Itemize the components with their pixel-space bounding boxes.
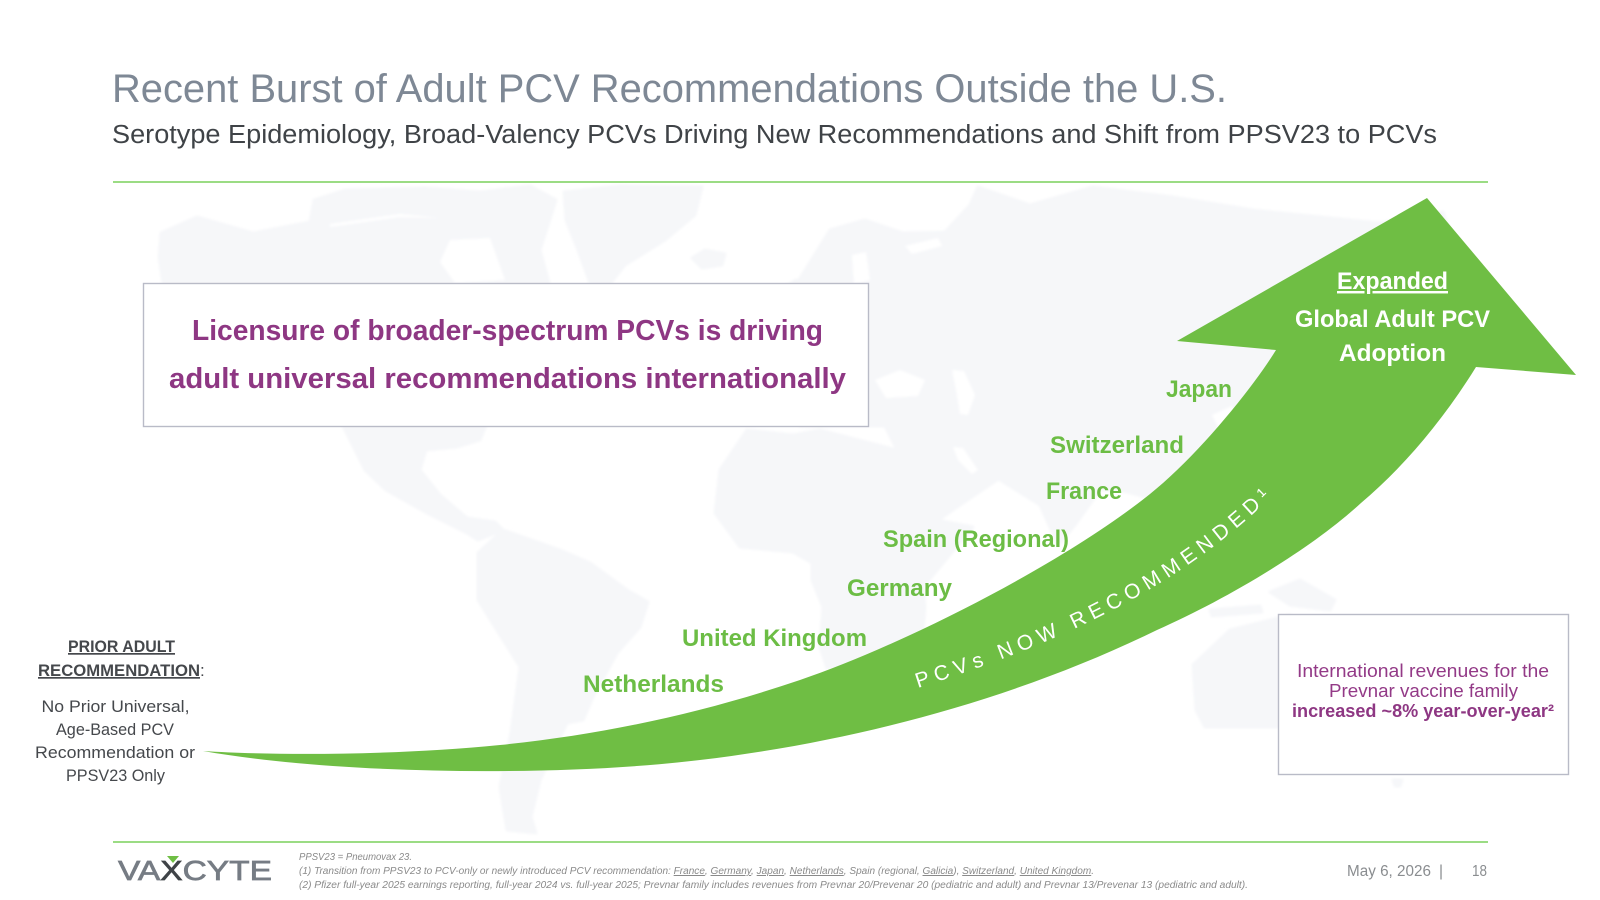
bottom divider xyxy=(113,841,1488,843)
arrowhead label: Expanded xyxy=(1337,268,1448,295)
callout box: licensure: Licensure of broader-spectrum PCVs is driving xyxy=(192,315,823,347)
footnotes: (2) Pfizer full-year 2025 earnings reporting, full-year 2024 vs. full-year 2025; Prevnar family includes revenues from Prevnar 20/Prevenar 20 (pediatric and adult) and Prevnar 13/Prevenar 13 (pediatric and adult). xyxy=(299,880,1248,891)
prior recommendation text: PRIOR ADULT xyxy=(68,637,176,656)
callout box: licensure xyxy=(144,284,868,426)
prior recommendation text xyxy=(35,637,205,785)
footnotes: PPSV23 = Pneumovax 23. xyxy=(299,852,412,863)
top divider xyxy=(113,181,1488,183)
country list: Spain (Regional) xyxy=(883,526,1069,553)
callout box: international revenues: increased ~8% year-over-year² xyxy=(1292,701,1554,721)
footnotes: (1) Transition from PPSV23 to PCV-only or newly introduced PCV recommendation: France, Germany, Japan, Netherlands, Spain (regional, Galicia), Switzerland, United Kingdom. xyxy=(299,866,1094,877)
footnotes xyxy=(299,852,1248,891)
prior recommendation text: RECOMMENDATION xyxy=(38,661,200,680)
lower North America xyxy=(340,420,503,540)
arrowhead label xyxy=(1295,268,1491,367)
country list xyxy=(583,376,1232,698)
map inland seas xyxy=(330,214,1238,474)
British Isles xyxy=(780,280,800,318)
country list: Japan xyxy=(1166,376,1232,403)
Australia and New Guinea xyxy=(1193,615,1290,727)
Africa xyxy=(715,430,973,668)
callout box: licensure: adult universal recommendations internationally xyxy=(169,363,846,395)
callout box: international revenues xyxy=(1278,614,1568,774)
Vaxcyte logo: VAXCYTE xyxy=(118,855,272,886)
date and page number xyxy=(1347,863,1487,880)
Alaska and Canada xyxy=(159,186,556,300)
country list: United Kingdom xyxy=(682,625,867,652)
Eurasia xyxy=(785,187,1470,545)
country list: France xyxy=(1046,478,1122,505)
date and page number: 18 xyxy=(1472,863,1487,880)
date and page number: | xyxy=(1439,863,1443,880)
title: Recent Burst of Adult PCV Recommendations Outside the U.S. xyxy=(112,67,1227,111)
callout box: international revenues: Prevnar vaccine family xyxy=(1329,681,1518,701)
Greenland xyxy=(564,186,702,284)
country list: Netherlands xyxy=(583,671,724,698)
arrowhead label: Adoption xyxy=(1339,340,1446,367)
date and page number: May 6, 2026 xyxy=(1347,863,1431,880)
prior recommendation text: PPSV23 Only xyxy=(66,766,165,785)
background world map xyxy=(159,186,1470,833)
arrow label: PCVs now recommended: PCVs NOW RECOMMENDED¹ xyxy=(915,488,1266,688)
growth arrow xyxy=(203,198,1576,771)
country list: Germany xyxy=(847,575,952,602)
Iceland xyxy=(692,250,725,268)
country list: Switzerland xyxy=(1050,432,1184,459)
prior recommendation text: Recommendation or xyxy=(35,743,195,762)
arrowhead label: Global Adult PCV xyxy=(1295,306,1491,333)
callout box: international revenues: International revenues for the xyxy=(1297,661,1549,681)
subtitle: Serotype Epidemiology, Broad-Valency PCVs Driving New Recommendations and Shift from PPSV23 to PCVs xyxy=(112,121,1437,149)
prior recommendation text: : xyxy=(200,661,205,680)
prior recommendation text: Age-Based PCV xyxy=(56,720,175,739)
South America xyxy=(478,530,648,833)
prior recommendation text: No Prior Universal, xyxy=(42,697,190,716)
